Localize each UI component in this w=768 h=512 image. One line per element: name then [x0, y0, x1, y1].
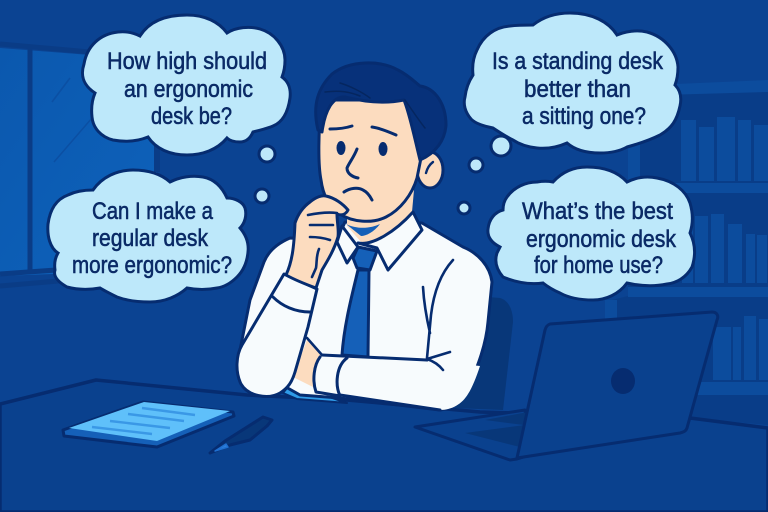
question text: regular desk	[92, 225, 209, 252]
shirt folds	[423, 260, 453, 370]
ear	[417, 152, 443, 188]
question text: a sitting one?	[522, 103, 646, 130]
question text: an ergonomic	[124, 76, 253, 103]
question text	[492, 48, 664, 130]
skin at elbow gap	[293, 340, 322, 387]
window	[0, 44, 160, 286]
resting forearm	[337, 358, 480, 410]
question text: How high should	[107, 48, 267, 75]
thought bubble 4	[488, 167, 694, 300]
laptop logo	[611, 368, 635, 394]
books: middle shelf	[682, 214, 767, 283]
notepad	[63, 402, 234, 447]
person	[237, 63, 492, 410]
question text: Is a standing desk	[492, 48, 664, 75]
question text	[72, 198, 232, 279]
question text: for home use?	[534, 252, 663, 279]
question text: desk be?	[151, 103, 232, 130]
hair	[316, 63, 446, 160]
tie knot	[353, 247, 377, 270]
books: lower shelf	[713, 316, 768, 380]
question text: ergonomic desk	[526, 226, 677, 253]
laptop base	[415, 410, 530, 460]
keyboard shadow	[465, 412, 528, 447]
forearm outline	[322, 355, 440, 410]
thought dots	[255, 136, 511, 214]
laptop lid	[517, 312, 718, 458]
laptop	[415, 312, 718, 460]
question text	[522, 198, 677, 279]
right collar	[358, 212, 422, 270]
question text: more ergonomic?	[72, 252, 232, 279]
question text: What’s the best	[522, 198, 673, 225]
torso crease by elbow	[307, 338, 322, 355]
blue sleeve underlay	[283, 378, 347, 403]
mouth	[344, 188, 372, 200]
face	[319, 100, 421, 221]
note lines	[92, 408, 195, 434]
desk	[0, 380, 768, 512]
thought bubble 3	[48, 170, 248, 302]
ear inner	[426, 162, 433, 173]
thought bubble 1	[82, 15, 290, 155]
question text: better than	[524, 76, 631, 103]
neck shadow	[346, 224, 380, 236]
left collar	[337, 226, 358, 263]
hair strands	[325, 83, 425, 128]
bookshelf	[605, 80, 768, 425]
question text: Can I make a	[92, 198, 214, 225]
torso	[238, 222, 492, 410]
books: top shelf	[681, 117, 768, 181]
eyebrows	[330, 126, 396, 135]
resting cuff	[314, 357, 347, 396]
raised forearm	[237, 274, 317, 396]
thought bubble 2	[464, 13, 681, 153]
nose	[347, 149, 358, 178]
fingers	[308, 213, 337, 277]
pen	[210, 417, 272, 453]
neck	[347, 190, 414, 243]
office chair	[455, 297, 513, 410]
eyes	[336, 141, 388, 156]
left cuff line	[273, 297, 310, 312]
hand on chin	[286, 196, 348, 288]
necktie	[342, 270, 369, 357]
question text	[107, 48, 267, 130]
